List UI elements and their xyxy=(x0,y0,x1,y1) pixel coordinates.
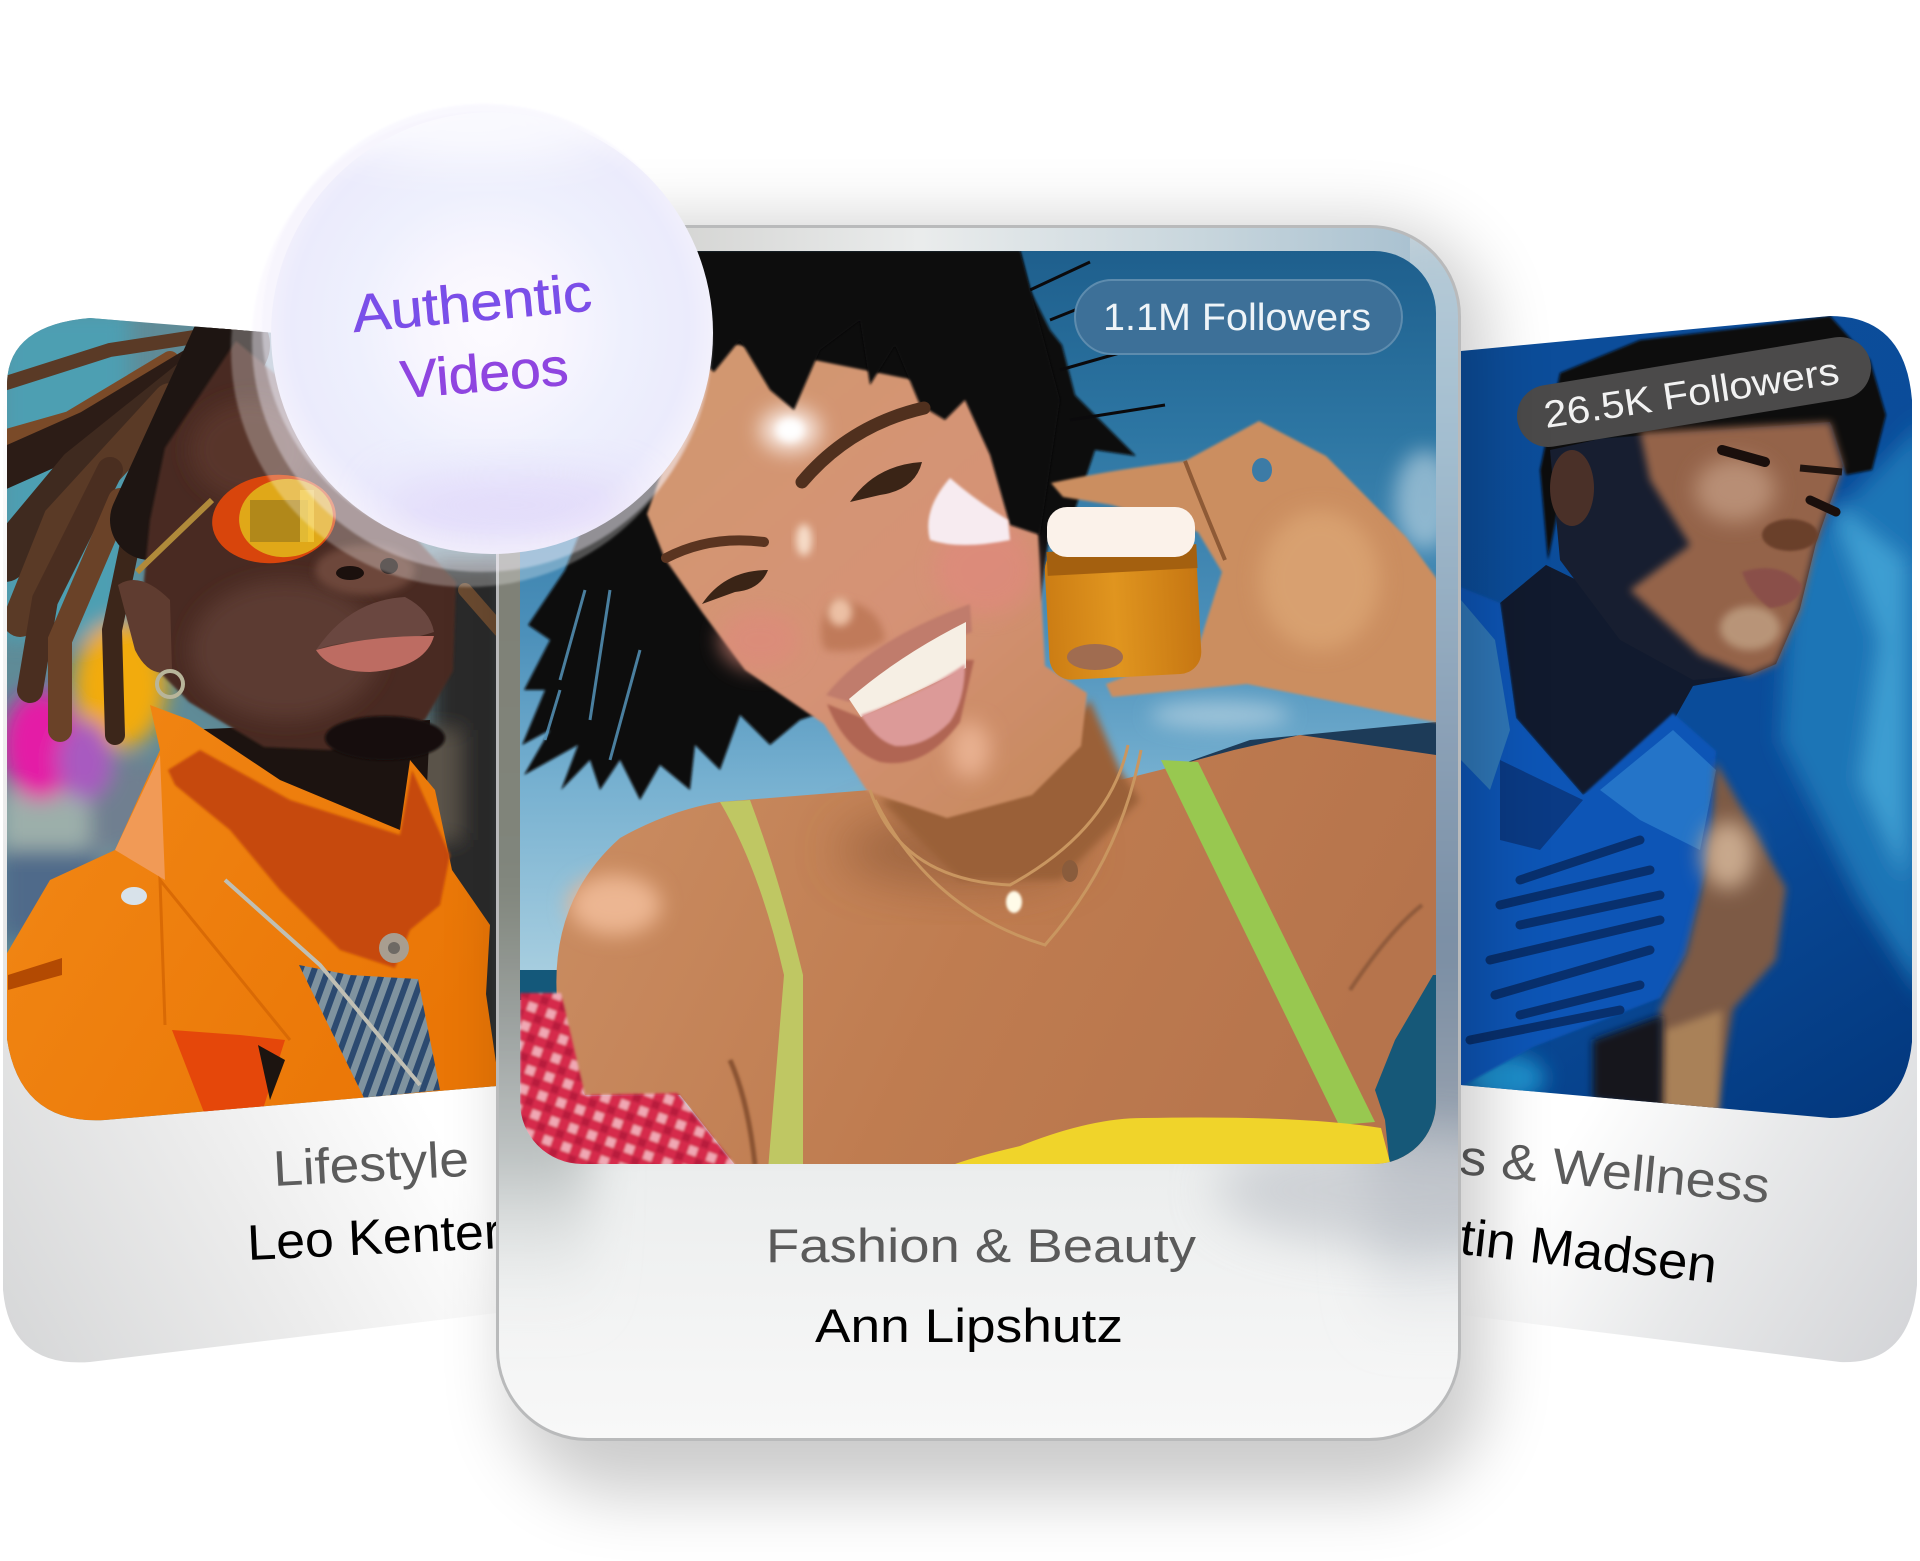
center card glass body xyxy=(400,226,1560,1440)
eyebrows xyxy=(802,408,924,482)
center card pill: 1.1M Followers xyxy=(1075,280,1402,354)
clouds xyxy=(1150,450,1455,729)
tongue xyxy=(861,664,965,746)
striped shirt xyxy=(299,965,440,1098)
bubble text line 1: Authentic xyxy=(350,263,594,344)
jar xyxy=(1044,507,1202,681)
neck xyxy=(204,720,430,830)
center card shadow xyxy=(510,225,1485,1495)
bubble text line 2: Videos xyxy=(398,338,570,410)
chain xyxy=(225,880,420,1085)
nose and lips xyxy=(315,545,415,595)
right card pill: 26.5K Followers: 26.5K Followers xyxy=(1541,351,1842,437)
shirt xyxy=(1455,585,1716,1090)
dreadlocks xyxy=(0,330,500,735)
upper lip xyxy=(826,604,972,702)
right card category: Fitness & Wellness: Fitness & Wellness xyxy=(1311,1115,1772,1214)
cream on cheek xyxy=(928,478,1010,545)
sea at lower right xyxy=(1375,975,1440,1170)
panel: left creator card xyxy=(0,300,510,1362)
bubble tints xyxy=(320,91,640,535)
panel: center creator card xyxy=(400,226,1560,1440)
lower lip xyxy=(827,660,974,763)
lapel shadow xyxy=(172,1030,285,1115)
right card photo: athlete in blue xyxy=(1455,300,1920,1130)
center card category: Fashion & Beauty: Fashion & Beauty xyxy=(766,1219,1197,1272)
panel: right creator card xyxy=(1311,300,1920,1362)
left card photo: Leo Kenter in orange jacket xyxy=(0,300,510,1130)
bubble outer halos xyxy=(231,104,712,587)
necklaces xyxy=(870,745,1141,945)
hair back xyxy=(522,251,1136,800)
fringe xyxy=(640,251,1060,535)
horizon and sea xyxy=(1150,722,1436,780)
head xyxy=(137,341,456,750)
face xyxy=(647,340,1087,818)
sunglasses xyxy=(137,500,212,572)
bikini straps xyxy=(1161,760,1375,1125)
eyes xyxy=(1722,450,1765,462)
center card pill: 1.1M Followers: 1.1M Followers xyxy=(1103,297,1371,339)
hair xyxy=(1540,316,1886,560)
left card body xyxy=(3,305,497,1362)
scarf xyxy=(168,750,450,968)
red gingham cloth xyxy=(520,993,739,1170)
snaps xyxy=(121,887,147,905)
teeth xyxy=(849,622,966,717)
neck shadow xyxy=(1500,565,1750,795)
nose xyxy=(821,600,885,651)
jacket xyxy=(0,705,500,1130)
cheek blush and shine xyxy=(935,525,1035,615)
ear xyxy=(1550,450,1594,526)
ear and earring xyxy=(118,580,172,672)
center card border xyxy=(498,226,1460,1440)
body xyxy=(556,735,1436,1170)
arm xyxy=(1656,762,1786,1110)
center card photo: Ann Lipshutz holding a jar xyxy=(520,251,1455,1170)
left card category: Lifestyle: Lifestyle xyxy=(272,1131,470,1197)
nose and lips xyxy=(1762,519,1818,551)
beard xyxy=(325,716,445,760)
right card body xyxy=(1461,305,1917,1362)
neck xyxy=(880,700,1140,880)
bubble main sphere xyxy=(271,112,713,554)
right card name: Justin Madsen: Justin Madsen xyxy=(1376,1199,1720,1294)
hand xyxy=(1051,421,1445,724)
hair strands xyxy=(1030,262,1165,420)
eyes xyxy=(850,462,922,502)
face xyxy=(1550,422,1843,680)
yellow top xyxy=(941,1117,1392,1170)
center card name: Ann Lipshutz: Ann Lipshutz xyxy=(815,1299,1123,1352)
sky gaps in hair xyxy=(545,590,640,760)
left card name: Leo Kenter: Leo Kenter xyxy=(246,1203,502,1271)
callout bubble: Authentic Videos xyxy=(231,91,713,587)
